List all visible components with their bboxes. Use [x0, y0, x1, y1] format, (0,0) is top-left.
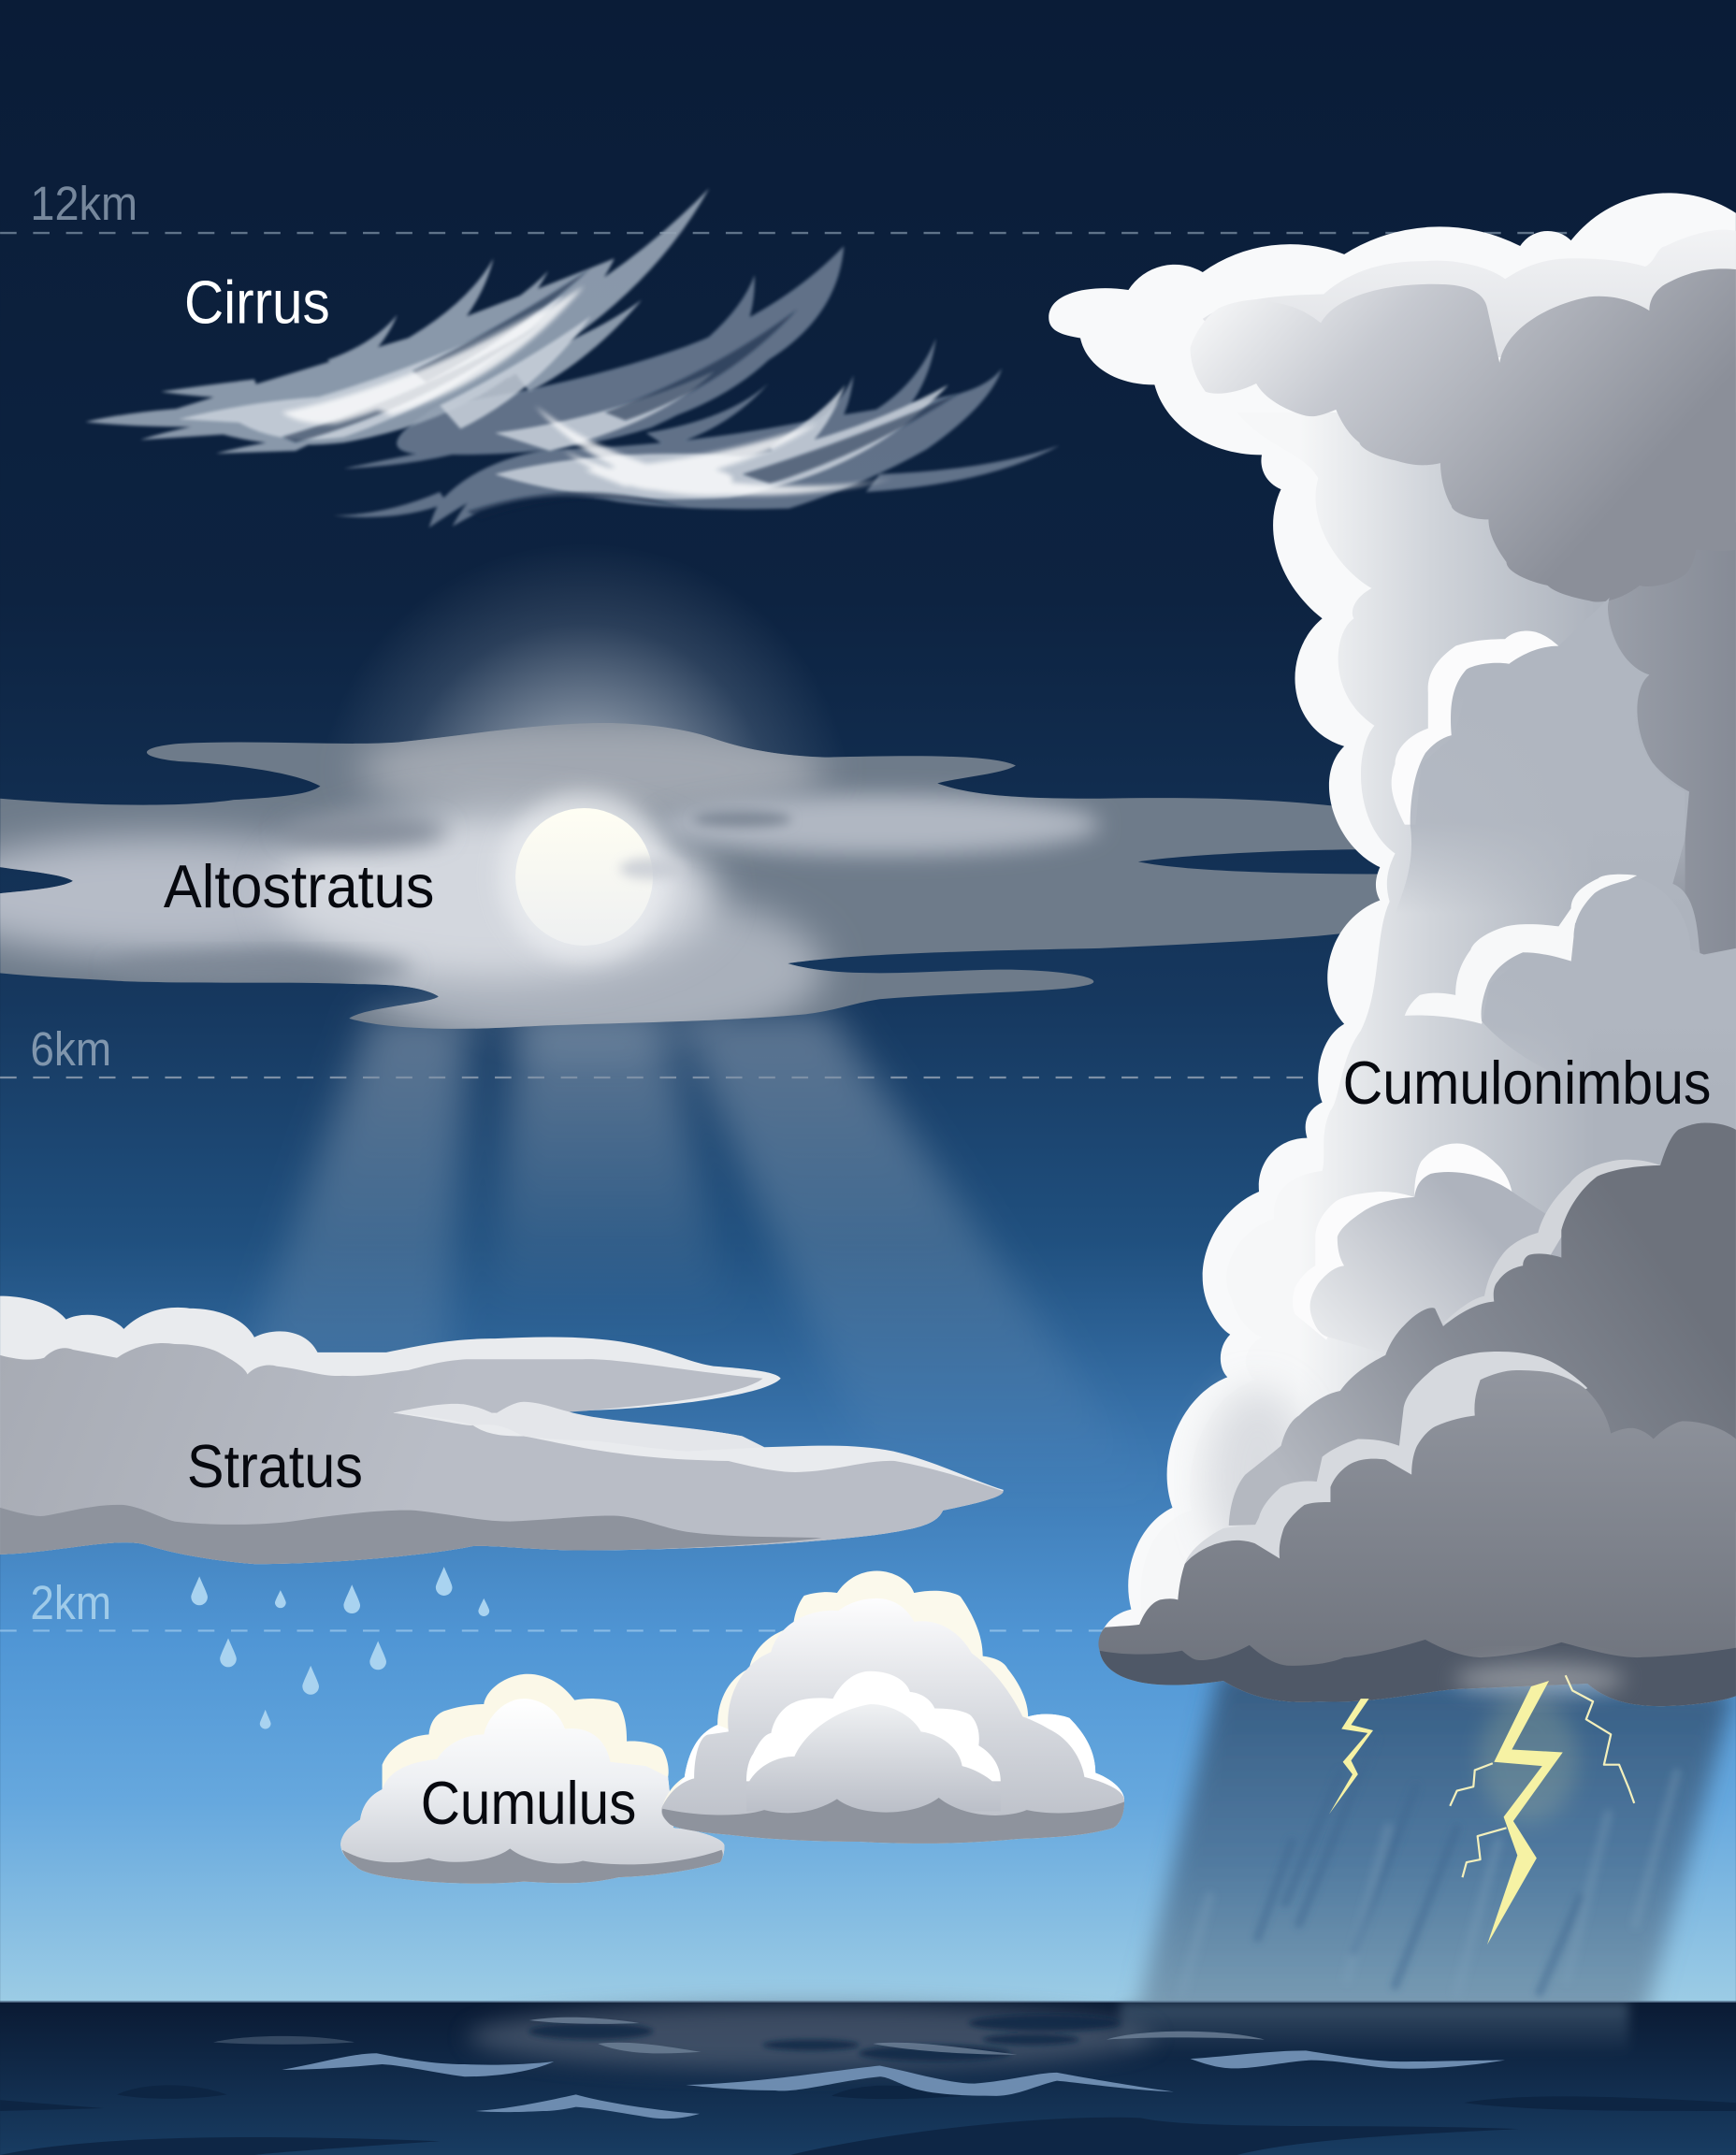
rain reflection	[1121, 2003, 1628, 2055]
altostratus cloud	[0, 715, 1388, 1051]
silhouette	[1049, 193, 1736, 1706]
puff one body	[1396, 598, 1685, 914]
anvil shaded puffs	[1191, 268, 1736, 602]
altitude line: 6km	[0, 1077, 1320, 1078]
altitude line: 2km	[0, 1629, 1113, 1631]
lightning bolts	[1329, 1675, 1634, 1945]
reflection dark ripples	[529, 2015, 1121, 2061]
altostratus label: Altostratus	[164, 852, 434, 920]
cumulonimbus cloud	[1049, 193, 1736, 1706]
puff two rim	[1405, 875, 1637, 1024]
right shaded column	[1608, 522, 1736, 955]
cumulonimbus label: Cumulonimbus	[1343, 1049, 1711, 1117]
cumulus label: Cumulus	[421, 1769, 636, 1837]
altitude line: 12km	[0, 232, 1567, 234]
small wave highlights	[213, 2018, 1265, 2055]
raindrops	[191, 1567, 489, 1728]
altitude label: 6km: 6km	[30, 1021, 111, 1076]
light rays	[240, 1010, 1168, 1511]
altitude label: 2km: 2km	[30, 1575, 111, 1629]
puff two body	[1482, 878, 1736, 1103]
sea	[0, 2001, 1736, 2155]
dark puffs rim	[1443, 1160, 1660, 1323]
stratus label: Stratus	[187, 1432, 363, 1500]
storm base	[1100, 1640, 1736, 1706]
cirrus cloud	[85, 188, 1060, 528]
lightning cloud glow	[1454, 1663, 1625, 1696]
dark water patches	[0, 2085, 1736, 2155]
lower storm body	[1098, 1370, 1736, 1706]
dark puffs	[1229, 1122, 1736, 1526]
rain shaft	[1136, 1670, 1734, 2020]
cirrus label: Cirrus	[184, 268, 330, 336]
altitude label: 12km: 12km	[30, 176, 137, 230]
sun behind altostratus	[499, 791, 686, 962]
puff one rim	[1392, 630, 1558, 825]
stratus cloud	[0, 1296, 1004, 1564]
inner shading	[1141, 412, 1736, 1616]
puff three rim	[1293, 1144, 1512, 1340]
puff three body	[1310, 1172, 1581, 1374]
sun glow halo	[316, 542, 852, 1078]
lower-left soft shading	[1206, 1388, 1309, 1567]
lower light rim	[1139, 1352, 1587, 1625]
sun reflection	[468, 2003, 1154, 2070]
cumulus right cloud	[661, 1571, 1124, 1844]
waves	[282, 2050, 1505, 2119]
cumulus left cloud	[340, 1674, 724, 1884]
feather strands	[282, 268, 962, 519]
anvil light band	[1203, 230, 1736, 357]
